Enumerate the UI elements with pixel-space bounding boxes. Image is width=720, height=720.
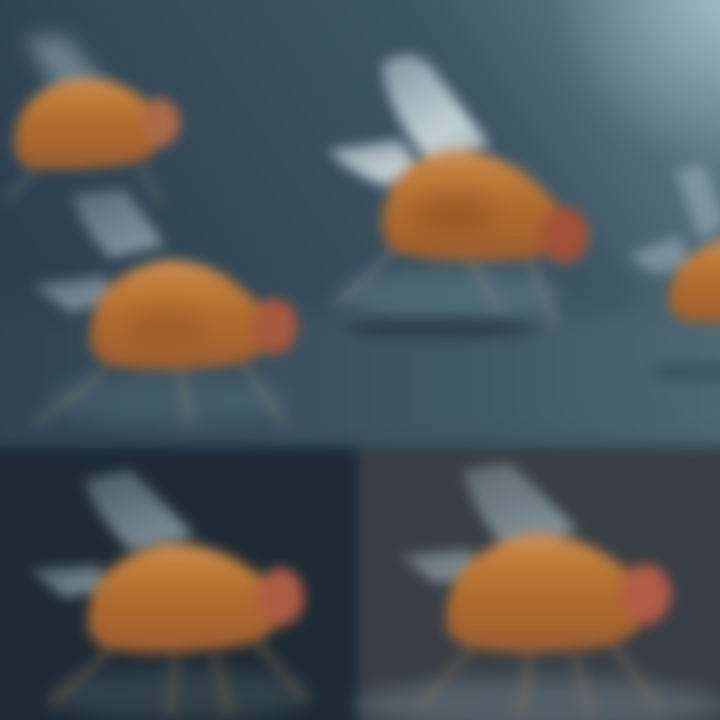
body xyxy=(88,543,285,653)
shadow xyxy=(650,362,720,382)
body dark centre xyxy=(127,307,203,343)
wings xyxy=(32,190,165,312)
body xyxy=(382,150,565,261)
ground haze xyxy=(340,269,560,321)
head xyxy=(140,98,180,146)
head xyxy=(619,564,671,624)
body dark centre xyxy=(415,192,495,232)
body xyxy=(668,238,720,325)
body xyxy=(446,533,650,653)
legs xyxy=(50,640,305,715)
background: top right glow xyxy=(550,0,720,170)
legs xyxy=(5,165,160,205)
ground haze xyxy=(50,374,290,426)
head xyxy=(540,207,588,263)
fly: right edge xyxy=(628,165,720,382)
panel: lower left dark xyxy=(0,447,358,720)
legs xyxy=(420,640,660,715)
fly: large top centre xyxy=(328,55,588,339)
fly: lower left xyxy=(30,470,310,720)
head xyxy=(251,298,297,354)
ground haze xyxy=(50,670,310,720)
fly: middle left xyxy=(32,190,297,426)
wings xyxy=(628,165,720,275)
legs xyxy=(35,365,285,425)
body xyxy=(14,78,165,169)
panel: lower right charcoal xyxy=(358,447,720,720)
wings xyxy=(25,36,110,98)
wings xyxy=(400,462,578,583)
wings xyxy=(328,55,490,186)
background: upper slate gradient xyxy=(0,0,720,450)
ground haze xyxy=(355,677,720,720)
body xyxy=(90,260,272,370)
shadow xyxy=(345,317,535,339)
head xyxy=(256,568,304,626)
background: lower band of upper panel xyxy=(0,310,720,450)
fly: lower right xyxy=(355,462,720,720)
legs xyxy=(335,250,555,325)
wings xyxy=(30,470,195,597)
fly: top left xyxy=(5,36,180,205)
